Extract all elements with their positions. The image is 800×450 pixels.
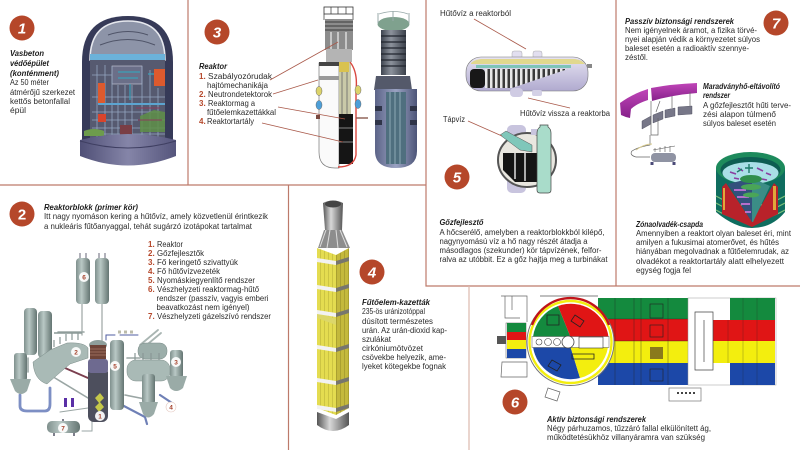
number labels	[58, 272, 181, 433]
core catcher text: Amennyiben a reaktort olyan baleset éri, mint	[636, 229, 792, 238]
numbered legend: Fő keringető szivattyúk	[157, 258, 239, 267]
pumps	[10, 350, 187, 418]
illustration: reactor block	[10, 253, 187, 436]
pipes	[20, 303, 172, 431]
panel 3 text: Reaktor	[199, 62, 228, 71]
numbered legend: 4.	[148, 267, 155, 276]
panel 1 text: átmérőjű szerkezet	[10, 88, 76, 97]
badge 7: 7	[772, 16, 781, 32]
panel 3 text: 4.	[199, 117, 206, 126]
badge 5: 5	[453, 170, 462, 186]
panel 2 heading and intro: Reaktorblokk (primer kör)	[44, 203, 138, 212]
panel 6: active safety systems	[497, 296, 776, 442]
residual heat removal text	[703, 82, 791, 128]
labels: Tápvíz	[443, 115, 465, 124]
panel 3 text: hajtómechanikája	[207, 81, 269, 90]
illustration: containment cutaway	[80, 16, 176, 166]
panel 4 text: Fűtőelem-kazetták	[362, 298, 431, 307]
panel 7 intro text	[625, 17, 760, 62]
panel 7 intro text: Passzív biztonsági rendszerek	[625, 17, 735, 26]
badge 5	[444, 164, 470, 190]
leader lines	[468, 19, 570, 136]
badge 7	[764, 10, 788, 36]
panel 5 text	[440, 218, 608, 264]
badge 4: 4	[367, 264, 377, 282]
illustration: horizontal steam generator	[466, 51, 592, 97]
numbered legend	[148, 240, 271, 321]
reactor vessel	[88, 340, 108, 422]
panel 4 text: csövekbe helyezik, ame-	[362, 353, 446, 362]
panel 3 text: 2.	[199, 90, 206, 99]
panel 6 text	[546, 415, 711, 442]
panel 1 text: (konténment)	[10, 69, 59, 78]
panel 3 text: Szabályozórudak	[208, 72, 273, 81]
panel 3 text: 3.	[199, 99, 206, 108]
illustration: steam generator section	[498, 125, 556, 193]
panel 3 text: 1.	[199, 72, 206, 81]
panel 5 text: Gőzfejlesztő	[440, 218, 485, 227]
steam generator left	[24, 308, 88, 384]
pressurizer	[110, 332, 133, 410]
badge 6: 6	[511, 394, 520, 412]
numbered legend: Gőzfejlesztők	[157, 249, 205, 258]
panel 1 text: épül	[10, 106, 26, 115]
panel 7 intro text: Nem igényelnek áramot, a fizika törvé-	[625, 26, 757, 35]
number labels: 2	[74, 350, 78, 356]
panel 1 text: Az 50 méter	[10, 78, 49, 87]
numbered legend: 7.	[148, 312, 155, 321]
tanks 6	[76, 253, 109, 304]
panel 4 text: szulákat	[362, 335, 392, 344]
residual heat removal text: súlyos baleset esetén	[703, 119, 776, 128]
panel 3 text: fűtőelemkazettákkal	[207, 108, 276, 117]
illustration: core catcher	[716, 152, 785, 228]
numbered legend: 5.	[148, 276, 155, 285]
panel 4 text: cirkóniumötvözet	[362, 344, 424, 353]
steam generator right	[127, 343, 170, 381]
panel 1: containment building	[10, 16, 176, 166]
panel 1 text	[10, 49, 76, 115]
badge 2: 2	[18, 206, 26, 224]
panel 2 heading and intro	[44, 203, 269, 231]
core catcher text	[635, 220, 792, 275]
number labels: 7	[61, 426, 65, 432]
core catcher text: olvadékot a reaktortartály alatt elhelyezett	[636, 257, 785, 266]
panel 3: reactor	[199, 7, 417, 168]
illustration: residual heat removal	[620, 83, 697, 165]
residual heat removal text: A gőzfejlesztőt hűti terve-	[703, 101, 791, 110]
core catcher text: hiányában megolvadnak a fűtőelemrudak, az	[636, 247, 789, 256]
core catcher text: Zónaolvadék-csapda	[635, 220, 703, 229]
numbered legend: rendszer (passzív, vagyis emberi	[156, 294, 269, 303]
residual heat removal text: rendszer	[703, 91, 731, 100]
panel 3 text: Neutrondetektorok	[208, 90, 273, 99]
panel 6 text: Négy párhuzamos, tűzzáró fallal elkülönített ág,	[547, 424, 711, 433]
number labels: 5	[113, 364, 117, 370]
panel 2 heading and intro: a nukleáris fűtőanyaggal, tehát sugárzó izotápokat tartalmat	[44, 222, 253, 231]
panel 1 text: védőépület	[10, 59, 49, 68]
numbered legend: Vészhelyzeti gázelszívó rendszer	[157, 312, 271, 321]
badge 2	[10, 202, 34, 226]
residual heat removal text: Maradványhő-eltávolító	[703, 82, 780, 91]
panel 4 text: lyeket kötegekbe fognak	[362, 362, 447, 371]
badge 3: 3	[213, 24, 222, 42]
panel 7 intro text: nyei alapján védik a környezetet súlyos	[625, 35, 760, 44]
labels: Hűtővíz a reaktorból	[440, 9, 511, 18]
badge 3	[204, 20, 230, 44]
residual heat removal text: zési alapon túlmenő	[703, 110, 777, 119]
number labels: 4	[169, 404, 173, 412]
panel 5: steam generator	[440, 9, 611, 264]
panel 7: passive safety systems	[620, 10, 792, 275]
panel 4 text: 235-ös uránizotóppal	[362, 307, 425, 316]
panel 2: primary circuit	[10, 202, 271, 436]
numbered legend: beavatkozást nem igényel)	[156, 303, 250, 312]
leader lines	[262, 42, 345, 142]
number labels: 3	[174, 360, 178, 366]
illustration: floor plan	[497, 296, 776, 401]
labels: Hűtővíz vissza a reaktorba	[520, 109, 611, 118]
panel 3 text	[199, 62, 276, 126]
panel 6 text: működtetésükhöz villanyáramra van szükség	[547, 433, 705, 442]
labels	[440, 9, 611, 124]
numbered legend: 1.	[148, 240, 155, 249]
numbered legend: Reaktor	[157, 240, 183, 249]
panel 3 text: Reaktortartály	[207, 117, 254, 126]
number labels: 6	[82, 274, 86, 282]
badge 4	[360, 260, 384, 284]
core catcher text: egység fogja fel	[636, 266, 691, 275]
panel 4: fuel assemblies	[317, 200, 447, 431]
panel 4 text	[362, 298, 447, 371]
panel 7 intro text: zéstől.	[625, 53, 648, 62]
core catcher text: amilyen a fukusimai atomerővet, és hűtés	[636, 238, 779, 247]
panel 1 text: Vasbeton	[10, 49, 44, 58]
numbered legend: 3.	[148, 258, 155, 267]
numbered legend: Nyomáskiegyenlítő rendszer	[157, 276, 255, 285]
badge 6	[502, 390, 528, 414]
panel 6 text: Aktív biztonsági rendszerek	[546, 415, 647, 424]
panel 4 text: urán. Az urán-dioxid kap-	[362, 326, 447, 335]
panel 5 text: A hőcserélő, amelyben a reaktorblokkból kilépő,	[440, 228, 604, 237]
panel 4 text: dúsított természetes	[362, 317, 433, 326]
panel 2 heading and intro: Itt nagy nyomáson kering a hűtővíz, amely közvetlenül érintkezik	[44, 212, 269, 221]
illustration: fuel assembly	[317, 200, 350, 431]
illustration: reactor exterior	[374, 11, 417, 168]
panel 7 intro text: baleset esetén a radioaktív szennye-	[625, 44, 749, 53]
tank 7	[47, 419, 80, 436]
panel 3 text: Reaktormag a	[208, 99, 256, 108]
valves	[64, 398, 74, 407]
numbered legend: Fő hűtővízvezeték	[157, 267, 221, 276]
badge 1: 1	[18, 20, 26, 38]
panel 5 text: másodlagos (szekunder) kör tápvízének, felfor-	[440, 246, 602, 255]
numbered legend: 6.	[148, 285, 155, 294]
badge 1	[10, 16, 34, 40]
panel 5 text: ralva az utóbbit. Ez a gőz hajtja meg a turbinákat	[440, 255, 608, 264]
illustration: reactor cross-section	[316, 7, 368, 168]
panel 1 text: kettős betonfallal	[10, 97, 70, 106]
panel 5 text: nagynyomású víz a hő nagy részét átadja a	[440, 237, 588, 246]
numbered legend: Vészhelyzeti reaktormag-hűtő	[157, 285, 260, 294]
number labels: 1	[98, 414, 102, 420]
numbered legend: 2.	[148, 249, 155, 258]
